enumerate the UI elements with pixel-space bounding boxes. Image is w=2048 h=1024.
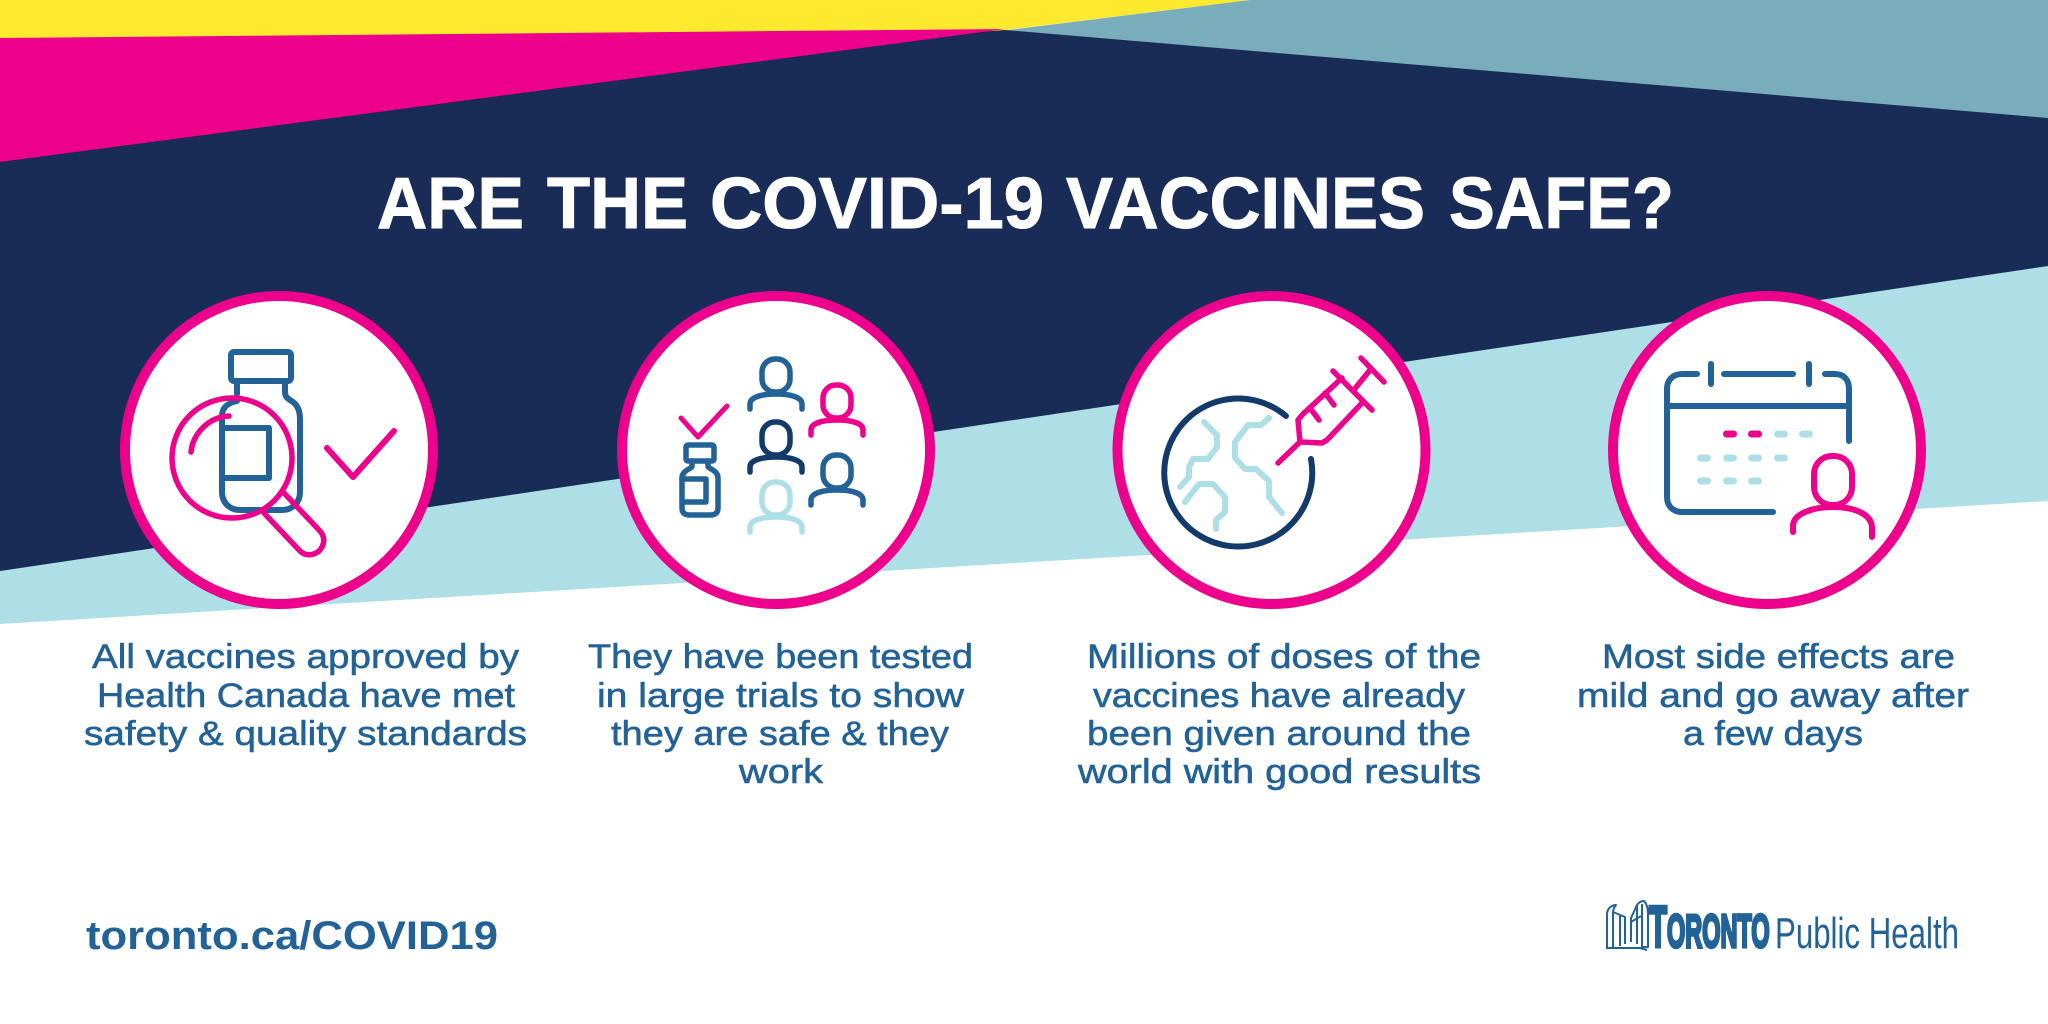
icon: calendar dots [1700,434,1810,481]
icon: small vial [682,445,718,515]
text: mild side effects: a few days [1683,715,1863,753]
text: large trials: they are safe & they [611,715,949,753]
icon: small check mark [681,406,727,437]
icon: calendar [1667,364,1849,512]
background: grey-teal wedge [1000,0,2048,118]
text: large trials: work [738,753,824,791]
text: doses given worldwide [1077,638,1481,791]
title: ARE [377,164,524,244]
text: doses given worldwide: world with good results [1077,753,1481,791]
icon: person [1793,456,1872,537]
icon: person pink [811,385,863,435]
text: large trials: in large trials to show [597,677,965,715]
title: VACCINES [1066,164,1425,244]
icon: syringe [1278,358,1384,463]
panel: doses given worldwide [1118,296,1426,604]
icon: person blue right [811,455,863,505]
text: doses given worldwide: been given around the [1087,715,1471,753]
background: light blue band [0,266,2048,624]
icon: person blue top [750,359,802,409]
logo: Toronto Public Health [1606,894,1959,960]
text: doses given worldwide: Millions of doses of the [1087,638,1481,676]
text: vaccine standards [84,638,527,753]
title: COVID-19 [710,164,1044,244]
circle badge 1 [125,296,433,604]
title: THE [547,164,688,244]
icon: person light blue [750,482,802,532]
circle badge 3 [1118,296,1426,604]
text: doses given worldwide: vaccines have already [1093,677,1465,715]
circle badge 2 [622,296,930,604]
circle badge 4 [1613,296,1921,604]
icon: person navy [750,422,802,472]
logo wordmark: Toronto: TORONTO [1649,894,1770,960]
text: vaccine standards: safety & quality standards [84,715,527,753]
icon: check mark [327,431,394,477]
text: large trials: They have been tested [588,638,973,676]
title: SAFE? [1449,164,1674,244]
website link: toronto.ca/COVID19 [86,914,498,958]
title [377,164,1674,244]
text: mild side effects: Most side effects are [1602,638,1955,676]
icon: globe [1164,399,1312,547]
icon: vial [222,352,300,510]
text: vaccine standards: Health Canada have met [97,677,516,715]
text: vaccine standards: All vaccines approved by [92,638,519,676]
background: yellow wedge [0,0,1250,60]
text: mild side effects: mild and go away after [1577,677,1969,715]
panel: mild side effects [1613,296,1921,604]
icon: city hall towers [1606,901,1648,950]
background: pink wedge [0,29,1005,162]
text: mild side effects [1577,638,1969,753]
icon: magnifying glass [172,398,324,555]
text: large trials [588,638,973,791]
background: navy band [0,30,2048,600]
logo wordmark: Public Health: Public Health [1775,909,1959,958]
panel: vaccine standards [125,296,433,604]
panel: large trials [622,296,930,604]
